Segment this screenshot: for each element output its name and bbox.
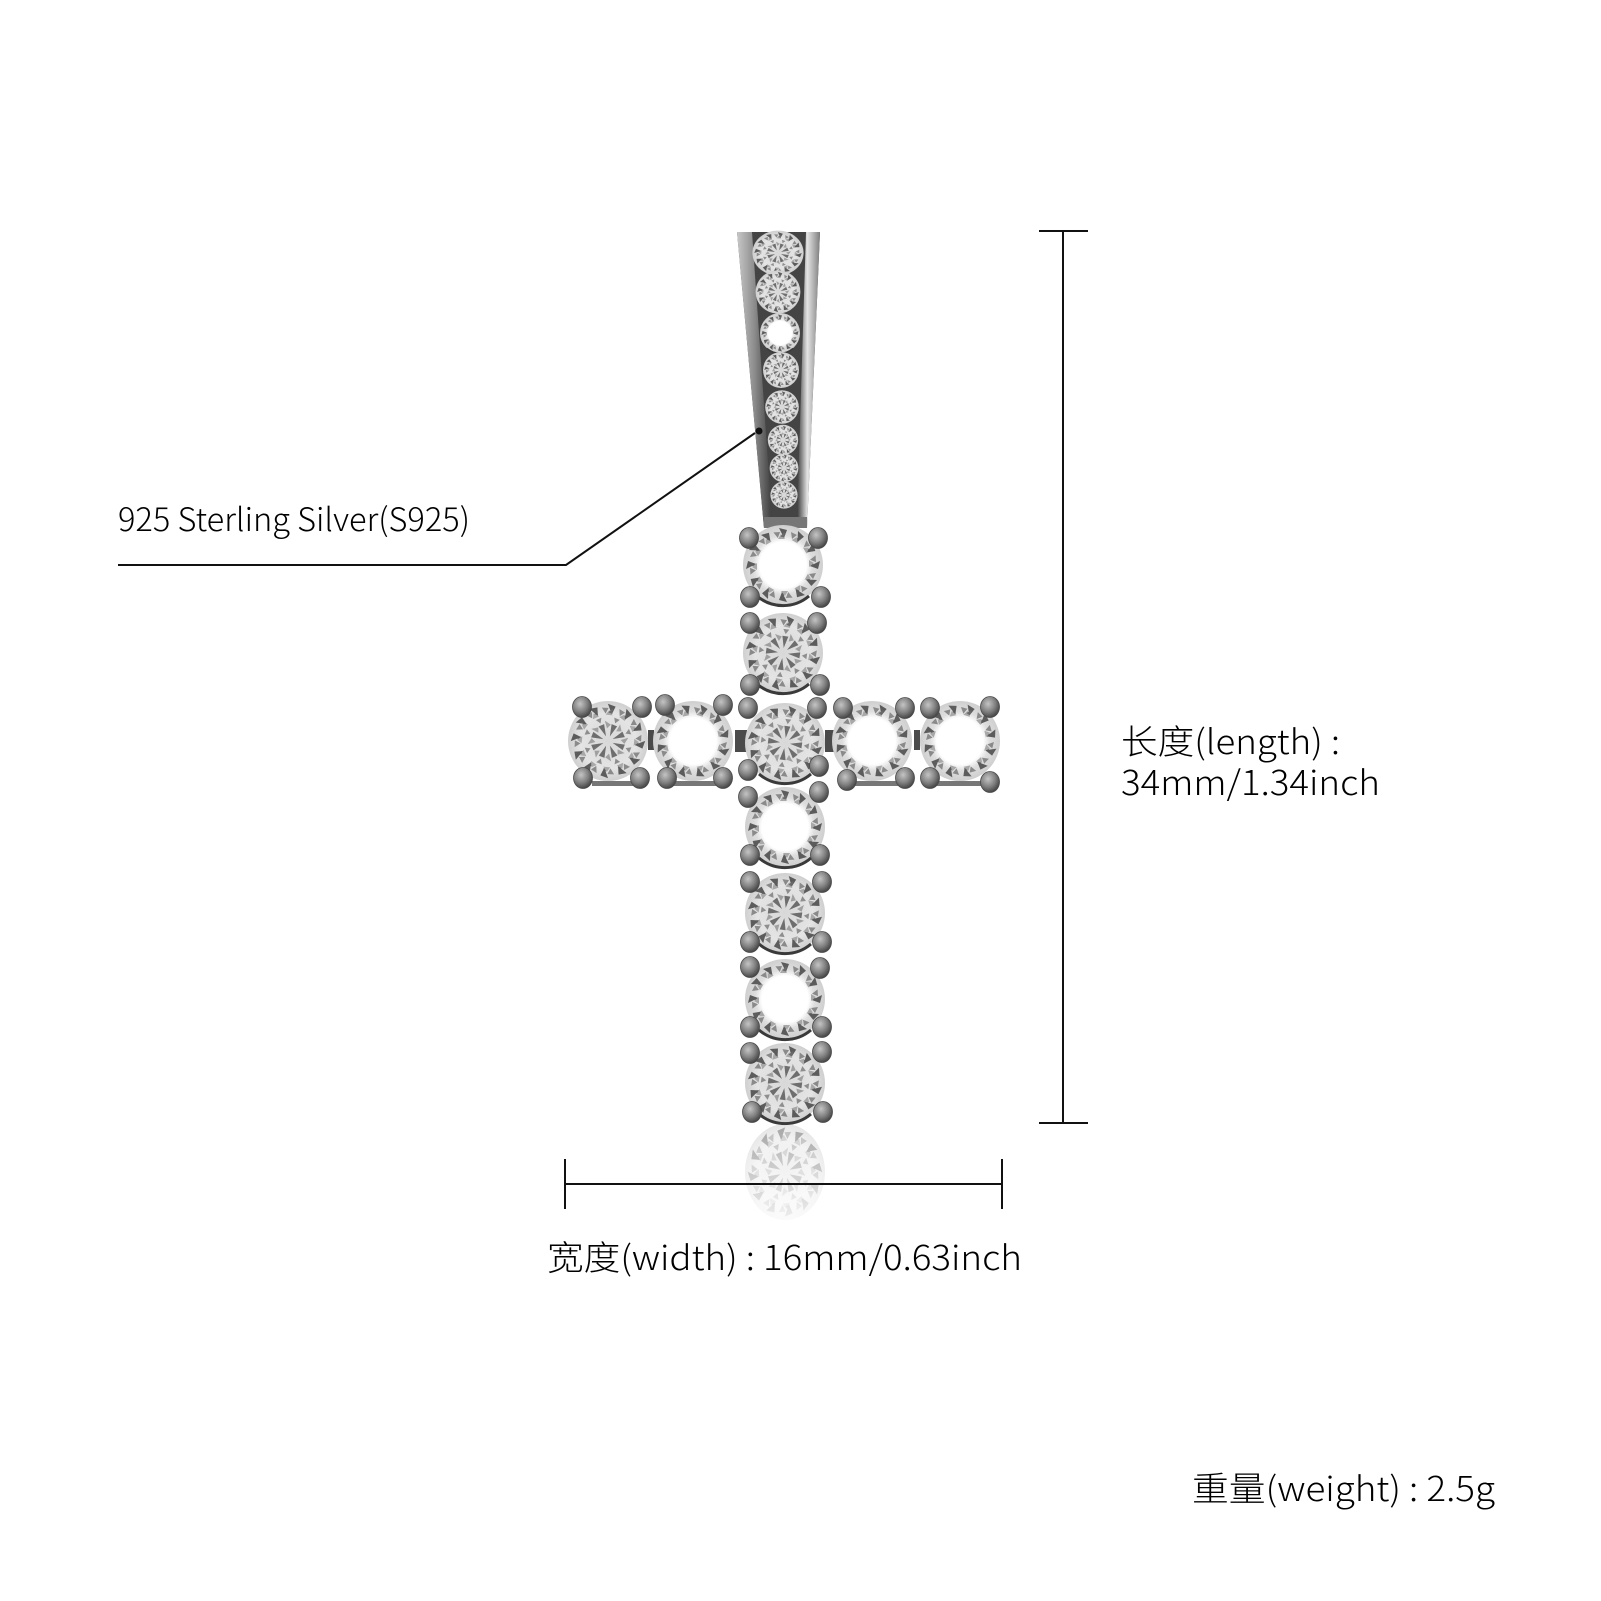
left arm stones xyxy=(563,689,745,793)
prongs xyxy=(572,528,1000,1122)
label: length xyxy=(1121,715,1380,805)
width dimension line xyxy=(565,1159,1002,1209)
label: material: 925 Sterling Silver(S925) xyxy=(118,495,470,541)
callout: material leader line xyxy=(118,428,762,565)
bail xyxy=(737,228,820,528)
pendant reflection xyxy=(745,1125,825,1216)
cross base metal xyxy=(592,730,990,786)
label: length: 34mm/1.34inch xyxy=(1121,756,1380,805)
right arm stones xyxy=(820,689,1012,793)
label: length: 长度(length) : xyxy=(1121,715,1340,764)
label: weight: 重量(weight) : 2.5g xyxy=(1192,1462,1496,1511)
vertical stones xyxy=(734,524,834,1132)
label: width: 宽度(width) : 16mm/0.63inch xyxy=(547,1231,1022,1280)
pendant: cross with bail xyxy=(563,228,1012,1132)
length dimension line xyxy=(1039,231,1088,1123)
